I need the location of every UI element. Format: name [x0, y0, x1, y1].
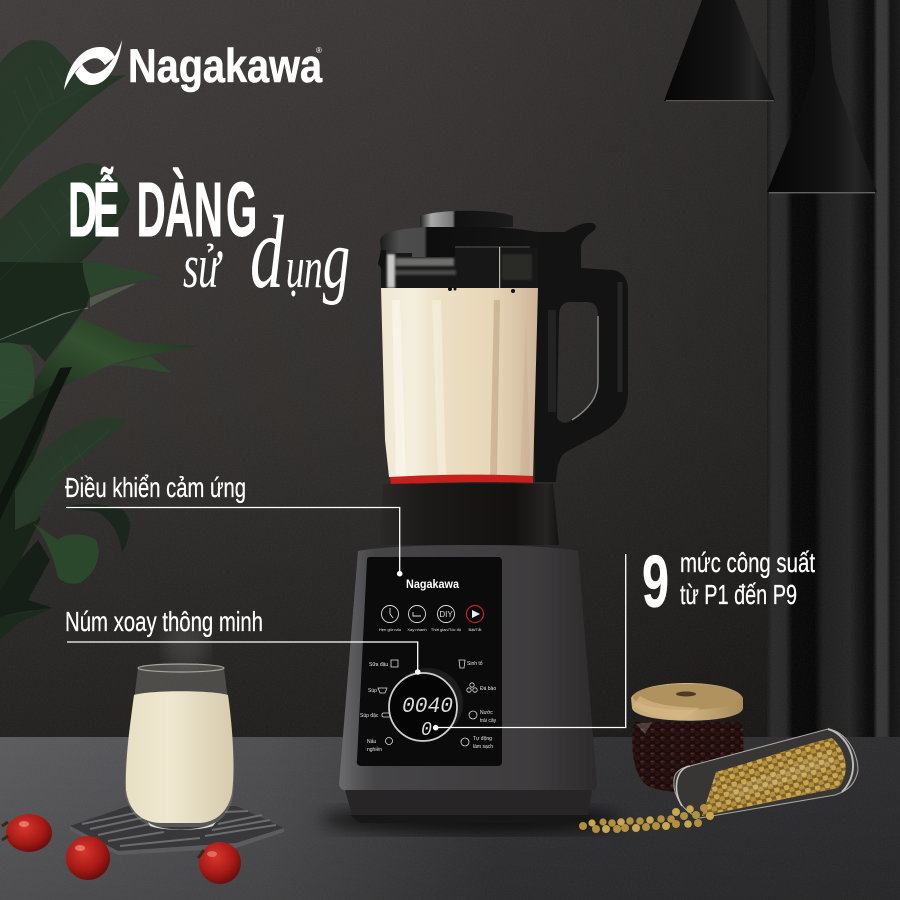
script subtitle: sử dụng: g — [323, 213, 350, 306]
jar handle — [530, 223, 628, 482]
menu options: Súp đặc — [360, 713, 379, 719]
control panel — [357, 557, 502, 766]
menu options: Nước — [480, 710, 493, 716]
dark lower wedge — [0, 308, 85, 362]
leaf veins — [0, 60, 118, 480]
spilled soybeans — [579, 804, 714, 833]
script subtitle: sử dụng: d — [250, 195, 285, 310]
glass of soy milk — [125, 664, 234, 830]
steam — [164, 621, 208, 669]
leaf: second — [0, 163, 130, 300]
callout line: smart knob — [67, 642, 421, 675]
menu options: Nấu — [367, 739, 376, 745]
dark leaf mass — [0, 262, 90, 340]
button captions: Hẹn giờ nấu — [379, 627, 401, 632]
menu options: Súp — [368, 688, 377, 694]
callout text: touch control: Điều khiển cảm ứng — [65, 472, 246, 503]
leaf underside — [90, 283, 137, 307]
round leaf — [0, 343, 34, 420]
logo: Nagakawa: ® — [316, 46, 322, 55]
dark curved leaf — [63, 504, 130, 553]
button captions — [379, 627, 482, 632]
jar liquid — [381, 288, 538, 477]
curtain — [767, 0, 900, 738]
callout: 9 power levels: từ P1 đến P9 — [680, 579, 797, 610]
rotary knob: 0 — [421, 719, 432, 741]
DIY label: DIY — [439, 610, 453, 619]
jar lid — [380, 226, 538, 257]
blender shadow — [320, 806, 620, 834]
menu options: làm sạch — [473, 744, 493, 750]
red seal ring — [390, 475, 533, 485]
coaster — [70, 806, 284, 855]
plant leaves — [0, 40, 198, 640]
button captions: Thời gian/Tốc độ — [431, 627, 462, 632]
cherry tomatoes — [2, 814, 241, 884]
title: DỄ DÀNG: À — [165, 167, 194, 254]
menu options: nghiền — [367, 747, 382, 753]
callout line: touch control — [66, 508, 403, 576]
leaf tip secondary — [110, 356, 172, 373]
menu options: Đá bào — [480, 686, 496, 692]
script subtitle: sử dụng: ử — [198, 232, 230, 301]
button captions: Xay nhanh — [407, 627, 427, 632]
menu options: Sữa đậu — [369, 662, 388, 668]
title: DỄ DÀNG: D — [68, 167, 97, 254]
leaf: pointed middle — [83, 262, 163, 296]
callout text: smart knob: Núm xoay thông minh — [65, 606, 263, 637]
bottom leaf — [0, 608, 53, 640]
pale leaf rib — [0, 308, 88, 340]
script subtitle: sử dụng: s — [183, 232, 199, 301]
menu options: trái cây — [480, 718, 497, 724]
menu options: Tự động — [473, 736, 492, 742]
blender — [320, 211, 628, 834]
bottle of soybeans — [674, 729, 858, 818]
small round leaf — [33, 523, 99, 584]
left dark mass — [0, 380, 60, 590]
collar — [380, 483, 559, 545]
callout line: power levels — [433, 554, 626, 730]
title: DỄ DÀNG: N — [194, 167, 223, 254]
callout: 9 power levels: mức công suất — [680, 547, 815, 578]
menu options: Sinh tố — [467, 661, 483, 667]
logo: Nagakawa — [64, 39, 323, 92]
rotary knob: 0040 — [402, 694, 453, 719]
title: DỄ DÀNG: G — [226, 167, 257, 254]
title: DỄ DÀNG: D — [137, 167, 166, 254]
jar top glass — [381, 247, 538, 302]
logo: Nagakawa: Nagakawa — [128, 39, 323, 92]
rotary knob — [389, 668, 463, 741]
jar of red beans — [631, 683, 744, 792]
script subtitle: sử dụng: n — [304, 235, 323, 300]
script subtitle: sử dụng: ụ — [286, 235, 305, 300]
button captions: Bật/Tắt — [469, 627, 482, 632]
pendant lamp left — [664, 0, 775, 101]
title: DỄ DÀNG: Ễ — [93, 167, 131, 254]
base body — [339, 545, 597, 791]
callout: 9 power levels — [642, 540, 815, 623]
leaf: lower long — [15, 417, 127, 530]
touch buttons — [382, 606, 484, 622]
leaf: top — [0, 40, 127, 190]
pendant lamp right — [767, 0, 877, 193]
leaf: large pointed — [33, 318, 198, 402]
leaf shadow mass — [0, 540, 53, 617]
panel brand: Nagakawa — [406, 577, 459, 591]
callout: 9 power levels: 9 — [642, 540, 669, 623]
menu options — [360, 660, 497, 753]
stem — [0, 367, 72, 520]
